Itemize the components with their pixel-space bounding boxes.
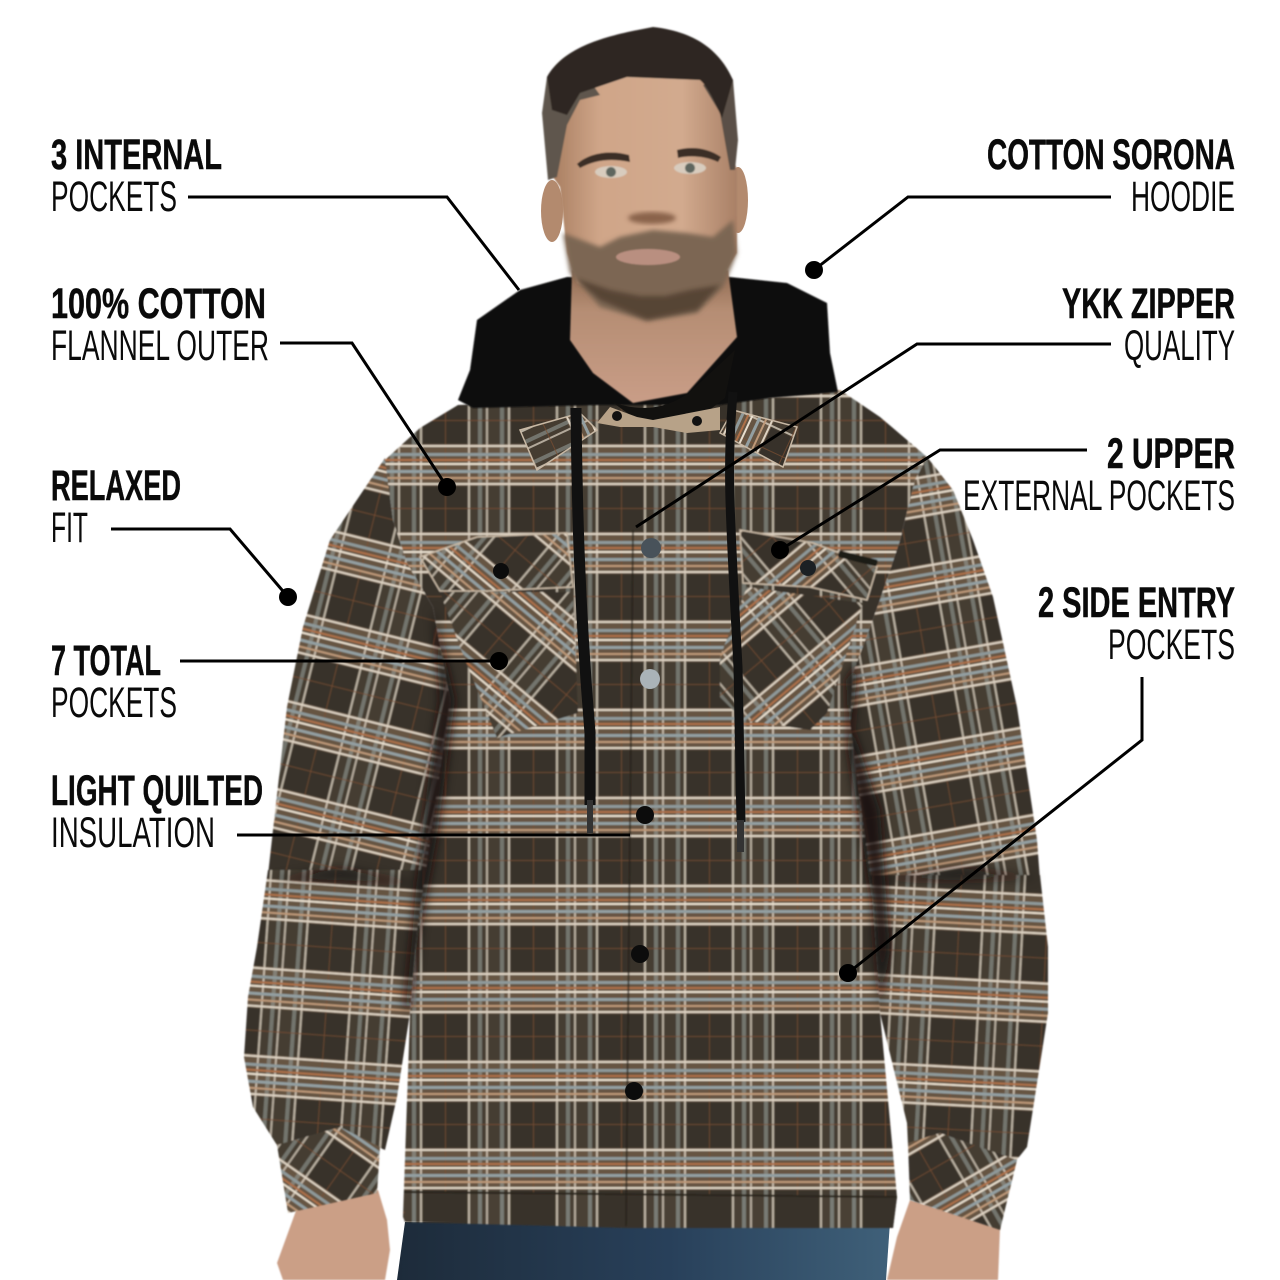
callout: YKK zipper quality [636, 280, 1235, 527]
left sleeve upper [268, 458, 450, 880]
right cuff [908, 1133, 1017, 1230]
callout: 3 internal pockets: 3 INTERNAL [51, 131, 222, 179]
hood [458, 277, 838, 408]
jeans [397, 1222, 890, 1280]
callout: 100% cotton flannel outer [51, 280, 456, 496]
neck [570, 270, 737, 403]
callout: light quilted insulation: INSULATION [51, 809, 215, 857]
callout: 100% cotton flannel outer: FLANNEL OUTER [51, 322, 269, 370]
hair [547, 27, 733, 118]
callout: relaxed fit: RELAXED [51, 462, 181, 510]
man wearing flannel hooded jacket [244, 27, 1048, 1280]
right ear [728, 167, 748, 233]
face [553, 77, 737, 320]
callout: light quilted insulation: LIGHT QUILTED [51, 767, 263, 815]
left sleeve lower [244, 870, 428, 1150]
hair sides [542, 60, 600, 180]
callout: relaxed fit: FIT [51, 504, 88, 552]
snap buttons [493, 538, 816, 1100]
left collar leaf [520, 413, 597, 470]
placket seam [626, 530, 633, 1226]
hem seam [404, 1192, 897, 1197]
hem band [404, 1192, 897, 1228]
right collar leaf [720, 410, 797, 467]
jacket body [385, 390, 927, 1228]
left hand [277, 1190, 390, 1280]
drawstring tips [587, 800, 593, 833]
right sleeve upper [850, 457, 1040, 880]
right hand [887, 1200, 1000, 1280]
callout: 7 total pockets: POCKETS [51, 679, 177, 727]
mouth [616, 249, 680, 265]
callout: 2 upper external pockets [771, 430, 1235, 559]
left pocket flap [420, 533, 573, 591]
nose shadow [628, 212, 676, 224]
callout: 100% cotton flannel outer: 100% COTTON [51, 280, 266, 328]
callout: relaxed fit [51, 462, 297, 606]
left pocket [440, 592, 578, 738]
right pocket [720, 587, 863, 730]
jacket [244, 390, 1048, 1230]
callout: 3 internal pockets: POCKETS [51, 173, 177, 221]
collar snaps [612, 411, 622, 421]
chest tag [838, 550, 878, 567]
callout: 2 side entry pockets [839, 579, 1235, 982]
callout: light quilted insulation [51, 767, 630, 857]
right sleeve lower [870, 875, 1048, 1162]
underarm shadows [270, 607, 1040, 1012]
left cuff [277, 1127, 380, 1213]
callout: 3 internal pockets [51, 131, 519, 290]
head [542, 27, 738, 321]
collar band [597, 407, 720, 433]
chin shadow [575, 278, 720, 320]
beard [563, 220, 737, 321]
callout: 7 total pockets [51, 637, 508, 727]
right drawstring [730, 392, 741, 822]
callout: cotton sorona hoodie [805, 131, 1235, 279]
right pocket flap [740, 530, 877, 600]
eyebrows [577, 152, 630, 168]
inner tee [612, 350, 735, 425]
callout: 7 total pockets: 7 TOTAL [51, 637, 161, 685]
left ear [541, 180, 563, 242]
eyes [595, 166, 627, 178]
left drawstring [576, 408, 590, 805]
